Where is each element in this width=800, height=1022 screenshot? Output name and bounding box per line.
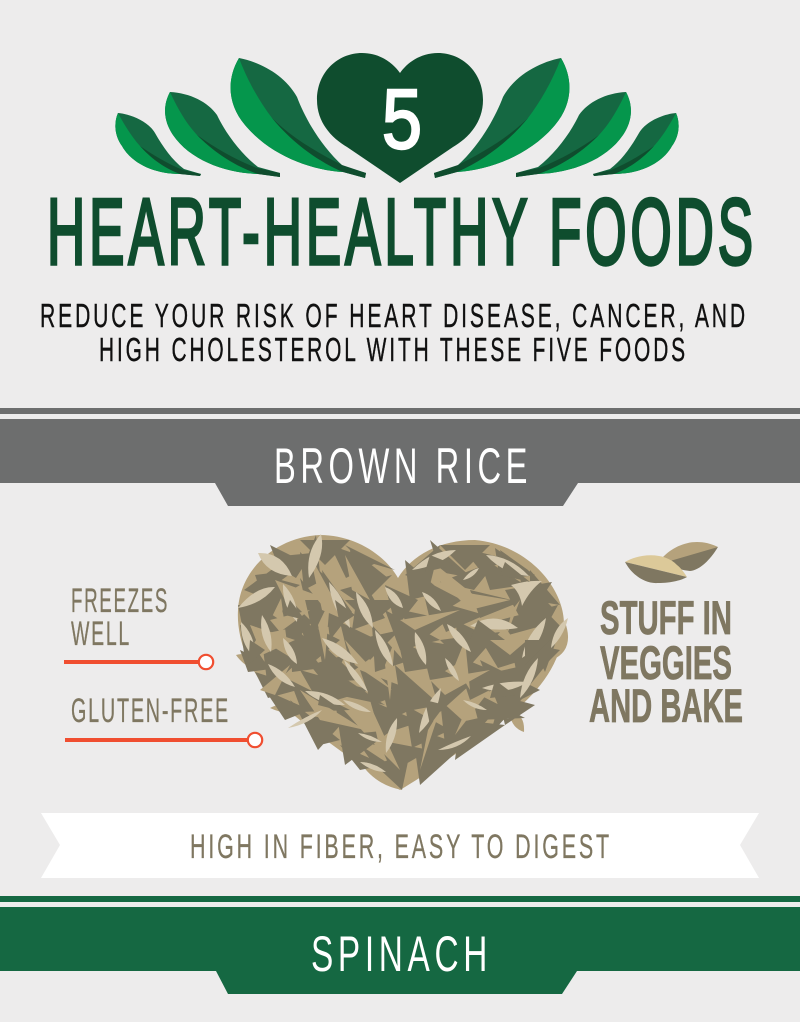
section header: spinach: SPINACH	[311, 926, 492, 982]
icon: right leaves	[434, 58, 679, 178]
callout: gluten-free: GLUTEN-FREE	[71, 692, 230, 730]
icon: rice grains	[625, 542, 718, 583]
banner: high in fiber	[41, 813, 759, 878]
icon: heart with number 5	[317, 53, 483, 183]
section header: brown rice	[0, 408, 800, 506]
callout: gluten-free	[65, 692, 262, 747]
section header: brown rice: BROWN RICE	[274, 438, 532, 494]
callout: freezes well	[64, 582, 213, 669]
callout: freezes well: FREEZES	[71, 582, 169, 620]
section header: spinach	[0, 896, 800, 994]
text: stuff in veggies and bake	[589, 591, 743, 732]
icon: left leaves	[115, 58, 366, 178]
icon: heart with number 5: 5	[382, 72, 422, 166]
subtitle	[40, 297, 748, 368]
callout: freezes well: WELL	[71, 615, 131, 653]
rice heart illustration	[236, 534, 568, 790]
